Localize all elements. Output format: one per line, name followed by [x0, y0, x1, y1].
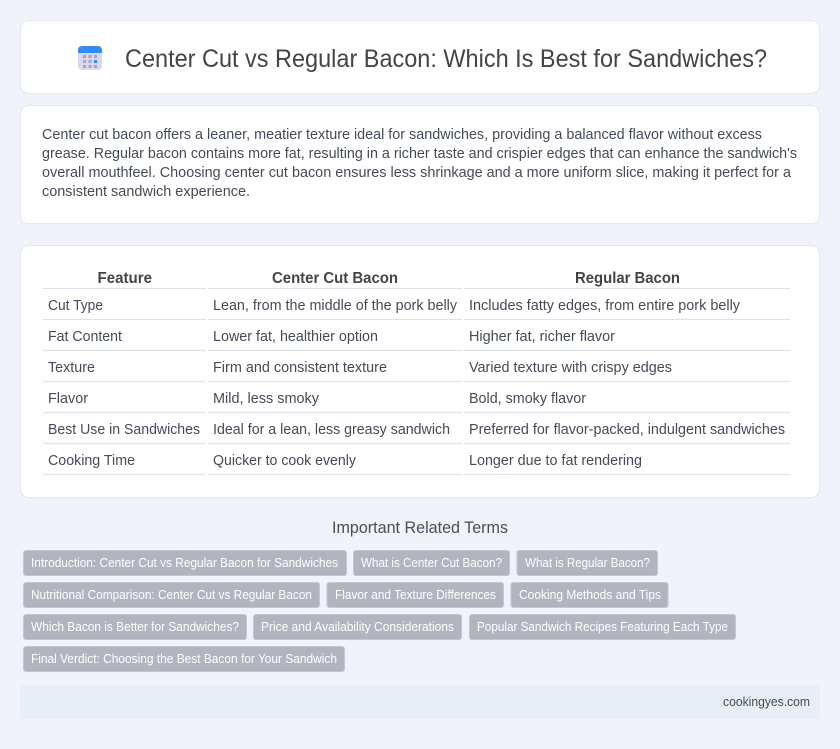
icon: calendar [78, 46, 102, 70]
table header: Feature [98, 270, 152, 287]
panel: introduction [20, 106, 820, 224]
tag: Popular Sandwich Recipes Featuring Each Type [477, 620, 728, 634]
tag [24, 550, 346, 576]
tag: What is Regular Bacon? [525, 556, 650, 570]
panel: comparison table [20, 246, 820, 498]
row: cooking time: Quicker to cook evenly [213, 453, 357, 469]
row: fat content [48, 329, 615, 345]
intro text: grease. Regular bacon contains more fat, resulting in a richer taste and crispier edges that can enhance the sandwich's [42, 146, 797, 162]
row: cooking time: Cooking Time [48, 453, 135, 469]
row: best use: Best Use in Sandwiches [48, 422, 200, 438]
tag: Which Bacon is Better for Sandwiches? [31, 620, 239, 634]
row: flavor: Mild, less smoky [213, 391, 320, 407]
tag: Cooking Methods and Tips [519, 588, 661, 602]
row: cut type: Lean, from the middle of the pork belly [213, 298, 458, 314]
row: cooking time: Longer due to fat rendering [469, 453, 642, 469]
intro text: consistent sandwich experience. [42, 184, 250, 200]
table header: Regular Bacon [575, 270, 680, 287]
tag [470, 614, 736, 640]
tag: Price and Availability Considerations [261, 620, 454, 634]
row: fat content: Lower fat, healthier option [213, 329, 378, 345]
row: cooking time [48, 453, 642, 469]
row: flavor [48, 391, 586, 407]
row: fat content: Higher fat, richer flavor [469, 329, 615, 345]
intro text: Center cut bacon offers a leaner, meatier texture ideal for sandwiches, providing a balanced flavor without excess [42, 127, 762, 143]
footer bar [20, 685, 820, 719]
tag: Final Verdict: Choosing the Best Bacon for Your Sandwich [31, 652, 337, 666]
tag [254, 614, 462, 640]
row: cut type [48, 298, 741, 314]
heading: related terms: Important Related Terms [332, 519, 508, 537]
tag: What is Center Cut Bacon? [361, 556, 502, 570]
row: texture: Varied texture with crispy edges [469, 360, 672, 376]
intro text: overall mouthfeel. Choosing center cut bacon ensures less shrinkage and a more uniform slice, making it perfect for a [42, 165, 792, 181]
table header [98, 270, 680, 287]
row: cut type: Includes fatty edges, from entire pork belly [469, 298, 741, 314]
row: best use: Ideal for a lean, less greasy sandwich [213, 422, 450, 438]
row: flavor: Bold, smoky flavor [469, 391, 586, 407]
tag [354, 550, 510, 576]
row: texture: Texture [48, 360, 95, 376]
intro text [42, 127, 797, 200]
tag [511, 582, 668, 608]
table header: Center Cut Bacon [272, 270, 398, 287]
row: best use [48, 422, 785, 438]
tag [24, 614, 246, 640]
row: texture: Firm and consistent texture [213, 360, 387, 376]
title: Center Cut vs Regular Bacon: Which Is Best for Sandwiches? [125, 46, 767, 73]
row: cut type: Cut Type [48, 298, 103, 314]
tag [327, 582, 504, 608]
tag [24, 646, 344, 672]
tag: Nutritional Comparison: Center Cut vs Regular Bacon [31, 588, 312, 602]
related term tags [24, 550, 736, 672]
row: best use: Preferred for flavor-packed, indulgent sandwiches [469, 422, 785, 438]
tag [24, 582, 320, 608]
header panel [20, 20, 820, 94]
tag: Introduction: Center Cut vs Regular Bacon for Sandwiches [31, 556, 338, 570]
footer source: cookingyes.com [723, 695, 810, 709]
tag [517, 550, 658, 576]
row: fat content: Fat Content [48, 329, 122, 345]
row: texture [48, 360, 672, 376]
row: flavor: Flavor [48, 391, 88, 407]
tag: Flavor and Texture Differences [335, 588, 496, 602]
